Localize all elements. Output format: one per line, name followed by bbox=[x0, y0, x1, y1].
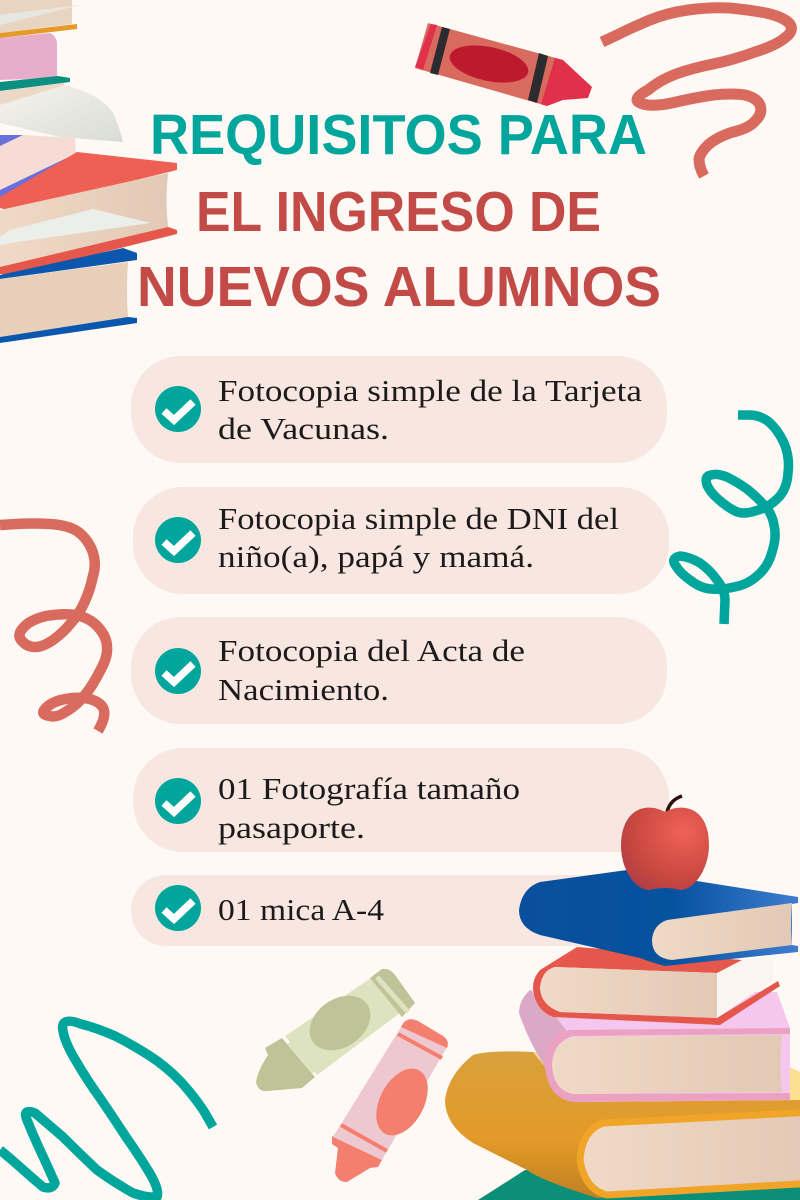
text: requirement 5: 01 mica A-4 bbox=[218, 892, 385, 927]
illustration: book stack top left bbox=[0, 0, 177, 343]
icon: check 5 bbox=[155, 885, 201, 931]
icon: check 3 bbox=[155, 648, 201, 694]
book: yellow orange bbox=[445, 1051, 800, 1198]
scribble: red left bbox=[0, 524, 107, 731]
text: requirement 3: Nacimiento. bbox=[218, 672, 389, 707]
icon: apple bbox=[621, 796, 709, 890]
icon: check 4 bbox=[155, 778, 201, 824]
book: blue bbox=[519, 870, 798, 966]
title: NUEVOS ALUMNOS bbox=[137, 255, 661, 319]
text: requirement 2: niño(a), papá y mamá. bbox=[218, 539, 534, 574]
text: requirement 4: pasaporte. bbox=[218, 810, 365, 845]
panel: requirement 4 bbox=[133, 748, 669, 852]
panel: requirement 5 bbox=[131, 875, 667, 946]
title: REQUISITOS PARA bbox=[150, 103, 647, 167]
book: pink bbox=[519, 990, 790, 1102]
illustration: book stack bottom right bbox=[445, 796, 800, 1200]
text: requirement 3 bbox=[218, 633, 525, 707]
panel: requirement 3 bbox=[131, 617, 667, 724]
illustration: pink crayon bbox=[332, 1019, 448, 1182]
scribble: teal right bbox=[674, 415, 788, 624]
icon: check 1 bbox=[155, 386, 201, 432]
scribble: red top right bbox=[602, 8, 791, 176]
text: requirement 1: de Vacunas. bbox=[218, 411, 389, 446]
book: red bbox=[533, 947, 780, 1025]
scribble: teal bottom left bbox=[0, 1021, 213, 1197]
panel: requirement 2 bbox=[133, 487, 669, 594]
title: EL INGRESO DE bbox=[196, 180, 601, 244]
illustration: green crayon bbox=[256, 969, 415, 1091]
text: requirement 4 bbox=[218, 771, 520, 845]
icon: check 2 bbox=[155, 517, 201, 563]
text: requirement 2: Fotocopia simple de DNI del bbox=[218, 501, 619, 536]
title bbox=[137, 103, 661, 319]
text: requirement 1 bbox=[218, 373, 642, 446]
panel: requirement 1 bbox=[131, 356, 667, 463]
text: requirement 3: Fotocopia del Acta de bbox=[218, 633, 525, 668]
text: requirement 2 bbox=[218, 501, 619, 574]
book: teal base bbox=[478, 1170, 800, 1200]
text: requirement 4: 01 Fotografía tamaño bbox=[218, 771, 520, 806]
illustration: red crayon bbox=[415, 23, 592, 106]
text: requirement 1: Fotocopia simple de la Tarjeta bbox=[218, 373, 642, 408]
